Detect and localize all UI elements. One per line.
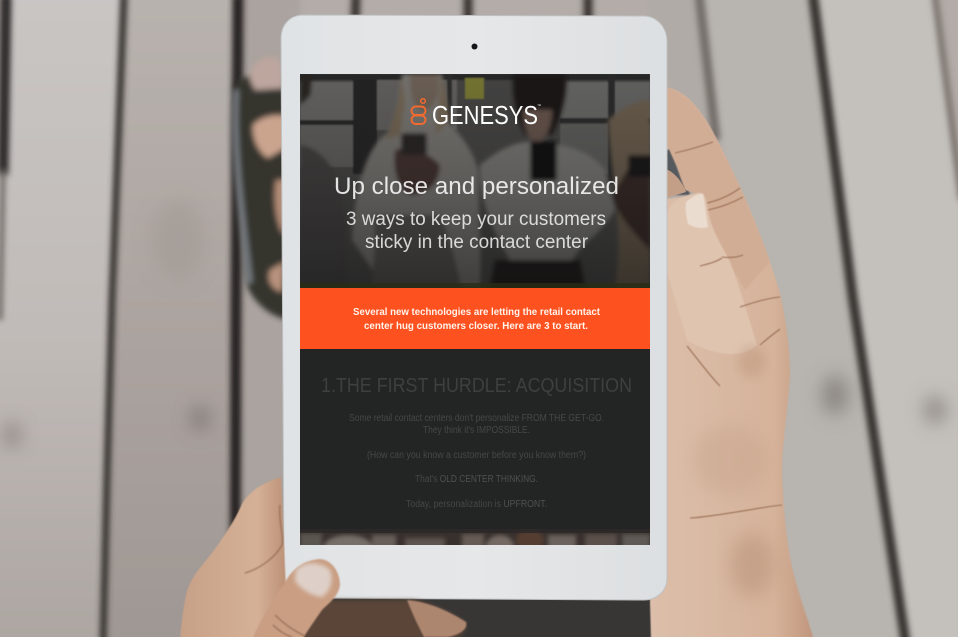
thumbnail	[295, 563, 331, 597]
headline: Up close and personalized	[334, 173, 619, 200]
fingers and palm	[180, 477, 290, 637]
logo: Genesys mark and wordmark: ™	[537, 103, 541, 108]
subheading	[346, 209, 606, 253]
dark area under the tablet	[290, 590, 660, 637]
thumb	[660, 193, 757, 354]
fingers under tablet	[295, 600, 466, 637]
section 1 heading: 1.THE FIRST HURDLE: ACQUISITION	[321, 375, 632, 397]
left hand	[180, 477, 466, 637]
tablet device	[281, 15, 667, 600]
logo: Genesys mark and wordmark: GENESYS	[432, 102, 538, 130]
header photo of people with phones	[300, 74, 652, 288]
subheading: 3 ways to keep your customers	[346, 209, 606, 230]
logo: Genesys mark and wordmark	[412, 99, 541, 130]
lower finger segment	[660, 170, 686, 200]
section 1 body copy: That's OLD CENTER THINKING.	[415, 474, 538, 485]
section 1 body copy: (How can you know a customer before you know them?)	[367, 450, 586, 461]
section 1 body copy: Today, personalization is UPFRONT.	[406, 499, 547, 510]
section 1 body copy	[349, 413, 604, 510]
section 1 body copy: Some retail contact centers don't personalize FROM THE GET-GO.	[349, 413, 604, 424]
camera	[472, 44, 478, 50]
tablet screen	[300, 74, 652, 559]
orange intro band: center hug customers closer. Here are 3 to start.	[364, 321, 588, 332]
section 1 body copy: They think it's IMPOSSIBLE.	[423, 425, 530, 436]
subheading: sticky in the contact center	[365, 232, 589, 253]
next section photo strip	[300, 529, 650, 545]
orange intro band	[300, 288, 650, 349]
sandal and foot behind the tablet	[232, 57, 290, 320]
thumb	[252, 559, 340, 637]
index finger	[660, 88, 770, 290]
thumbnail	[686, 194, 708, 228]
orange intro band: Several new technologies are letting the retail contact	[353, 307, 601, 318]
right hand holding tablet edge	[650, 88, 814, 637]
